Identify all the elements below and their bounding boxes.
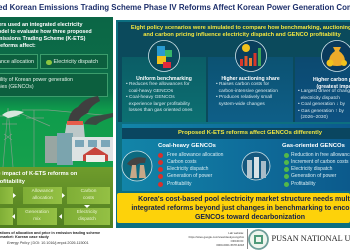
heading: Higher auctioning share [221,76,280,82]
callout: conclusion [117,193,350,223]
bullets: • Reduces free allowances for [126,82,190,87]
bullets [298,88,350,120]
column: coal-heavy GENCOs: Free allowance allocation [167,152,223,158]
footer: lab website [188,231,244,247]
box: electricity dispatch: dispatch [78,216,96,222]
column: gas-oriented GENCOs: Profitability [291,181,315,187]
column: coal-heavy GENCOs [158,143,224,187]
box: electricity dispatch [64,208,110,225]
icon: coal plant [122,150,152,182]
heading [0,171,77,185]
footer: lab website: ORCID ID: [231,239,244,243]
panel: policy scenarios: Eight policy scenarios were simulated to compare how benchmarking, auctioning, [131,24,350,30]
heading [313,77,350,90]
box: profitability [0,208,13,225]
box: electricity dispatch: Electricity [77,210,97,215]
footer: lab website: 0000-0001-5678-9218 [216,243,244,247]
bullets [216,82,278,107]
panel: policy scenarios: and carbon pricing influence electricity dispatch and GENCO profitability [143,32,341,38]
bullets: experience larger profitability [129,102,190,107]
icon: coin chart [235,40,267,72]
bullets: (2026–2030) [301,115,328,120]
bullets: • Raises carbon costs for [216,82,269,87]
panel: study overview [0,17,113,167]
box: generation mix [17,208,57,225]
column: gas-oriented GENCOs [282,143,350,187]
scenarios header [118,22,350,122]
bullets: coal-heavy GENCOs [129,89,173,94]
icon: stacked blocks [148,40,180,72]
box: carbon costs: Carbon [81,189,96,194]
box: generation mix: mix [33,216,41,222]
column: coal-heavy GENCOs: Electricity dispatch [167,166,208,172]
column: gas-oriented GENCOs: Gas-oriented GENCOs [282,143,345,149]
box: carbon costs [67,187,110,204]
bullets: • Produces relatively small [216,95,272,100]
column: coal-heavy GENCOs: Carbon costs [167,159,196,165]
illustration: power plant [0,96,113,167]
column: gas-oriented GENCOs: Electricity dispatch [291,166,332,172]
bullets [126,82,192,113]
footer: citation: Energy Policy | DOI: 10.1016/j.enpol.2026.115001 [7,241,89,245]
icon: money bag [321,40,350,72]
column: coal-heavy GENCOs: Generation of power [167,173,212,179]
section heading [122,128,350,139]
column: coal-heavy GENCOs: Coal-heavy GENCOs [158,143,216,149]
card: higher carbon price [295,57,350,122]
icon: gas plant [242,152,270,180]
box: electricity dispatch [40,54,108,69]
heading: Uniform benchmarking [136,76,192,82]
panel: GENCO effects [122,124,350,191]
bullets: system-wide changes [219,102,265,107]
box: allowance allocation [0,54,38,69]
box: allowance allocation: allocation [32,196,53,200]
arrows [12,193,90,219]
footer: lab website: https://sites.google.com/view/deukyoungchoi [189,235,244,239]
box: allowance allocation [23,187,62,204]
bullets: • Coal generation ↓ by [298,102,345,107]
box: electricity dispatch: Electricity dispatch [54,58,98,64]
bullets: carbon-intensive generation [219,89,278,94]
column: coal-heavy GENCOs: Profitability [167,181,191,187]
bullets: electricity dispatch [301,96,340,100]
column: gas-oriented GENCOs: Increment of carbon costs [291,159,349,165]
card: uniform benchmarking [122,57,206,122]
column: gas-oriented GENCOs: Generation of power [291,173,336,179]
panel: policy scenarios [116,20,350,228]
callout: conclusion: GENCOs toward decarbonization [195,214,305,220]
footer: lab website: Lab website: [228,231,244,235]
box: carbon costs: costs [83,196,94,200]
bullets: • Coal-heavy GENCOs [126,95,175,100]
box: generation mix: Generation [25,210,49,215]
study description [0,22,92,49]
bullets: losses than gas oriented ones [129,108,192,113]
box: profitability [0,73,108,97]
bullets: • Gas generation ↑ by [298,108,344,114]
panel: impact pathway [0,167,113,228]
box: policy [0,187,13,204]
footer: citation [0,230,100,245]
card: higher auctioning share [208,57,293,122]
icon: check [46,60,52,65]
section heading: Proposed K-ETS reforms affect GENCOs differently [178,130,322,136]
logo: university seal [248,229,269,250]
box: allowance allocation: Allowance [32,189,53,194]
